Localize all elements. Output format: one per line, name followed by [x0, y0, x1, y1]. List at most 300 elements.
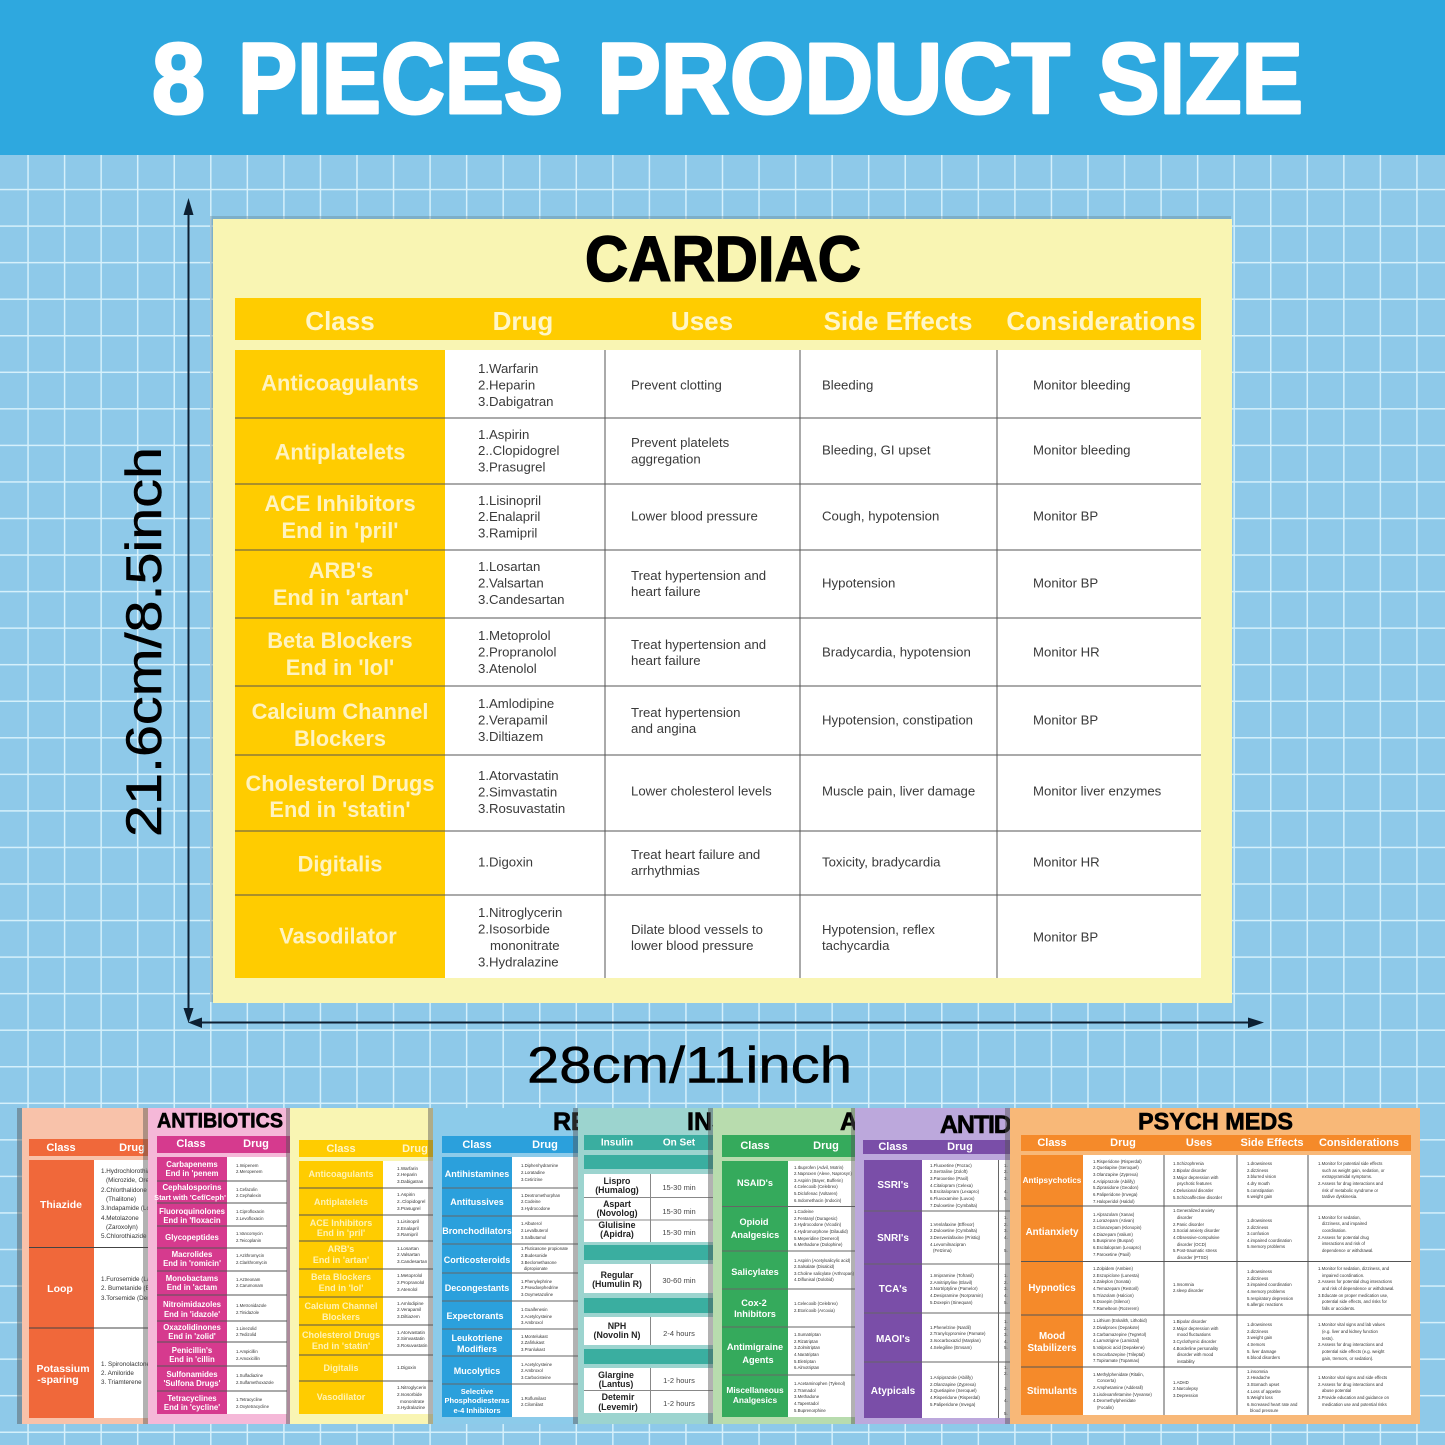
table body: Aspart [603, 1199, 631, 1209]
row: digitalis: Monitor HR [1033, 854, 1100, 870]
table body: 3.weight gain [1247, 1334, 1273, 1340]
table body: 2.Heparin [397, 1172, 417, 1176]
table body: Agents [742, 1355, 774, 1365]
row: calcium channel blockers: Treat hypertension [631, 704, 740, 720]
table body [864, 1160, 1015, 1418]
table body: 2.Duloxetine (Cymbalta) [930, 1228, 978, 1232]
heading: insulin: INSULIN [687, 1108, 787, 1136]
heading: analgesics: ANALGESICS [840, 1108, 1004, 1136]
table body: 1.Cefazolin [236, 1186, 258, 1192]
table header: Side Effects [1241, 1137, 1303, 1149]
title: PRODUCT [597, 23, 1070, 135]
table body: 1.Acetylcysteine [521, 1362, 553, 1366]
table header: Drug [493, 306, 553, 336]
table body: 5.Chlorothiazide [101, 1232, 147, 1240]
table body: 1.Sulfadiazine [236, 1372, 264, 1378]
row: cholesterol drugs: 3.Rosuvastatin [478, 800, 565, 816]
table body: 2.Tranylcypromine (Parnate) [930, 1330, 986, 1336]
table header [1021, 1135, 1411, 1151]
table body: 1.insomnia [1247, 1368, 1268, 1374]
table body: blood pressure [1250, 1408, 1279, 1412]
table body: ACE Inhibitors [310, 1218, 372, 1228]
table header: Side Effects [824, 306, 972, 336]
table body: End in 'pril' [317, 1228, 365, 1238]
row: vasodilator: Monitor BP [1033, 930, 1098, 944]
table body: coordination. [1322, 1228, 1347, 1232]
table body: End in 'artan' [313, 1255, 369, 1265]
table header: Insulin [601, 1138, 633, 1148]
table body: 6.Fluvoxamine (Luvox) [930, 1196, 975, 1200]
table body: 2.Narcolepsy [1173, 1386, 1199, 1390]
row: vasodilator: 2.Isosorbide [478, 921, 550, 936]
table body: 3.Cetirizine [521, 1176, 543, 1182]
table body: 1.Aspirin [397, 1192, 415, 1196]
table body: 2.Salsalate (Disalcid) [794, 1264, 835, 1268]
table body: Concerta) [1097, 1378, 1116, 1382]
table body: 2. [1004, 1168, 1008, 1174]
table body: 3.Salbutamol [521, 1234, 546, 1240]
table body: 3. [1004, 1332, 1008, 1336]
table body: (Apidra) [600, 1229, 634, 1239]
table body: 2.Enalapril [397, 1226, 419, 1230]
table body: 3. [1004, 1176, 1008, 1180]
table body: 2.Amitriptyline (Elavil) [930, 1280, 973, 1284]
table body: 6.Almotriptan [794, 1364, 820, 1370]
table header: Drug [119, 1142, 145, 1154]
table body: Nitroimidazoles [163, 1300, 222, 1308]
table body: 1.ADHD [1173, 1380, 1189, 1384]
table body: 1. [1004, 1162, 1008, 1168]
row: calcium channel blockers: and angina [631, 720, 697, 736]
table body: 5.Buspirone (Buspar) [1093, 1238, 1134, 1242]
table body: 2.Olanzapine (Zyprexa) [930, 1382, 976, 1386]
table body: 3.Choline salicylate (Arthropan) [794, 1270, 855, 1276]
table body: dipropionate [524, 1266, 548, 1270]
table body: 2.Assess for potential drug [1318, 1234, 1369, 1240]
table body: 1.Schizophrenia [1173, 1160, 1204, 1166]
heading: cardiac: CARDIAC [585, 223, 861, 295]
arrow: width dimension [188, 1018, 1264, 1028]
table body: 3.Isocarboxazid (Marplan) [930, 1338, 981, 1342]
table body: 1.Albuterol [521, 1220, 542, 1226]
table body: 2.Ambroxol [521, 1368, 543, 1372]
table body: 1.Aripiprazole (Abilify) [930, 1374, 973, 1380]
table body: 2.dizziness [1247, 1168, 1268, 1172]
table body: 1.Ampicillin [236, 1348, 258, 1354]
table body: 3.Oxymetazoline [521, 1292, 554, 1296]
table body: 7.Ramelteon (Rozerem) [1093, 1306, 1139, 1310]
table body: 3.Clonazepam (Klonopin) [1093, 1224, 1142, 1230]
table body: End in 'floxacin [163, 1216, 221, 1224]
table body: ARB's [328, 1244, 354, 1254]
table header: Class [740, 1140, 770, 1152]
table header: Drug [947, 1141, 973, 1153]
row: calcium channel blockers [252, 696, 1098, 750]
table body: (Zaroxolyn) [106, 1224, 138, 1230]
table body: 5. [1004, 1344, 1008, 1350]
table body: 3.Diltiazem [397, 1314, 420, 1318]
table body: 6.blood disorders [1247, 1354, 1280, 1360]
table body: NSAID's [737, 1178, 773, 1188]
row: antiplatelets: Antiplatelets [275, 440, 405, 464]
table body: 2.Amoxicillin [236, 1356, 260, 1360]
row: beta blockers [267, 628, 1100, 680]
row: anticoagulants: Anticoagulants [261, 370, 419, 396]
table body: 1.Metoprolol [397, 1272, 422, 1278]
table body: Corticosteroids [444, 1255, 510, 1265]
table body: 4.Hydromorphone (Dilaudid) [794, 1228, 849, 1234]
table body: 6.Increased heart rate and [1247, 1402, 1298, 1406]
row: beta blockers: Monitor HR [1033, 644, 1100, 660]
table body: 1.Venlafaxine (Effexor) [930, 1222, 975, 1226]
table body: 1. [1004, 1214, 1008, 1220]
row: anticoagulants: Bleeding [822, 378, 873, 392]
table body: 1.Digoxin [397, 1364, 417, 1370]
panel: antidepressants poster [851, 1108, 1170, 1424]
table body: 3.Educate on proper medication use, [1318, 1292, 1388, 1298]
table body: 2.Headache [1247, 1374, 1271, 1380]
row: anticoagulants: 1.Warfarin [478, 360, 538, 376]
table body: 2.Tedizolid [236, 1332, 257, 1336]
table body: Antihistamines [445, 1169, 509, 1179]
table body: 4.dry mouth [1247, 1180, 1270, 1186]
table body: 1.Linezolid [236, 1326, 257, 1330]
table body: extrapyramidal symptoms. [1322, 1174, 1372, 1178]
table body: 2.dizziness [1247, 1276, 1268, 1280]
table body: 1.Diphenhydramine [521, 1162, 559, 1168]
table body: Bronchodilators [442, 1226, 512, 1236]
table body: 5. [1004, 1248, 1008, 1252]
row: ace inhibitors: Monitor BP [1033, 508, 1098, 524]
table body: 1.Montelukast [521, 1334, 549, 1338]
table body [584, 1155, 718, 1413]
table body: Thiazide [40, 1199, 82, 1211]
table body: 2.Acetylcysteine [521, 1314, 553, 1318]
table body: 3.Ramipril [397, 1232, 418, 1236]
table body: 4. [1004, 1188, 1008, 1194]
table body: 1.Vancomycin [236, 1230, 263, 1236]
table body: 5. liver damage [1247, 1348, 1277, 1354]
title: SIZE [1098, 23, 1303, 135]
row: anticoagulants: 2.Heparin [478, 377, 535, 392]
table body: SSRI's [877, 1180, 909, 1190]
table body: 1.Fluticasone propionate [521, 1246, 569, 1250]
table body: 3.Torsemide (Demadex) [101, 1294, 168, 1302]
table body: 4. [1004, 1292, 1008, 1298]
table body: 2.Pseudoephedrine [521, 1284, 559, 1290]
title [152, 23, 1303, 135]
table body: mood fluctuations [1177, 1332, 1211, 1336]
row: cholesterol drugs: Lower cholesterol levels [631, 784, 772, 798]
table body: Carbapenems [166, 1160, 218, 1168]
table body: 3.confusion [1247, 1230, 1270, 1236]
table body: End in 'lol' [319, 1283, 363, 1293]
arrow: height dimension [184, 198, 194, 1023]
table body: Cholesterol Drugs [302, 1330, 380, 1340]
table body: Regular [601, 1270, 634, 1280]
table body: Lispro [604, 1176, 631, 1186]
row: beta blockers: Bradycardia, hypotension [822, 644, 971, 660]
row: antiplatelets: 3.Prasugrel [478, 459, 546, 474]
table body: 2.Levofloxacin [236, 1216, 264, 1220]
table body: (Focalin) [1097, 1404, 1114, 1410]
table body: 2.Fentanyl (Duragesic) [794, 1216, 838, 1220]
table header [157, 1136, 290, 1153]
row: ace inhibitors [264, 490, 1098, 542]
row: cholesterol drugs: Monitor liver enzymes [1033, 784, 1162, 798]
table body: 7.Haloperidol (Haldol) [1093, 1198, 1135, 1204]
table body: 1.Imipenem [236, 1162, 259, 1168]
table body: 3.Hydrocodone (Vicodin) [794, 1222, 842, 1226]
row: cholesterol drugs: Cholesterol Drugs [246, 770, 434, 796]
row: vasodilator: Hypotension, reflex [822, 922, 935, 936]
table body: Anticoagulants [308, 1169, 374, 1179]
table body: 3.Zolmitriptan [794, 1344, 821, 1350]
table body: Cephalosporins [163, 1182, 222, 1192]
table body: 4.Diazepam (Valium) [1093, 1232, 1133, 1236]
table body: 1-2 hours [663, 1376, 695, 1384]
row: beta blockers: Beta Blockers [267, 628, 413, 652]
table body: End in 'zolid' [168, 1332, 216, 1340]
table body: 1.Sumatriptan [794, 1332, 821, 1336]
table body: Mood [1039, 1330, 1065, 1342]
table body: 3.Nortriptyline (Pamelor) [930, 1286, 978, 1290]
table body: 5.Diclofenac (Voltaren) [794, 1190, 838, 1196]
table body: e-4 Inhibitors [453, 1406, 501, 1414]
table body: 3.Dabigatran [397, 1178, 424, 1184]
table body: 1.Roflumilast [521, 1396, 547, 1400]
table body: interactions and risk of [1322, 1240, 1366, 1246]
row: digitalis: arrhythmias [631, 862, 700, 878]
table body: NPH [608, 1321, 626, 1331]
table body: disorder [1177, 1214, 1193, 1220]
panel: cardiac poster [210, 216, 1232, 1003]
table body: 5.Schizoaffective disorder [1173, 1194, 1223, 1200]
row: ace inhibitors: End in 'pril' [282, 518, 398, 542]
table body: 1. Spironolactone [101, 1360, 151, 1368]
row: antiplatelets: Prevent platelets [631, 434, 730, 450]
table body: 2. [1004, 1222, 1008, 1226]
table body: (Humalog) [595, 1185, 639, 1195]
table body: potential side effects, and risks for [1322, 1298, 1387, 1304]
table body: (Microzide, Oretic) [106, 1176, 157, 1184]
table body: Stimulants [1027, 1386, 1078, 1396]
row: beta blockers: heart failure [631, 652, 701, 668]
table body: 4.Desipramine (Norpramin) [930, 1292, 983, 1298]
table body: 1.Tetracycline [236, 1396, 263, 1402]
table body: 3.Olanzapine (Zyprexa) [1093, 1172, 1138, 1176]
table body: 2.Eszopiclone (Lunesta) [1093, 1272, 1140, 1278]
table body: such as weight gain, sedation, or [1322, 1168, 1385, 1172]
table body: MAOI's [876, 1334, 910, 1344]
table body: Oxazolidinones [163, 1322, 221, 1332]
table body [442, 1157, 578, 1417]
table body: Glulisine [598, 1220, 636, 1230]
table body: 6.weight gain [1247, 1194, 1273, 1198]
table header: Class [1037, 1137, 1067, 1149]
table body: 6.Methadone (Dolophine) [794, 1242, 843, 1246]
table body: 5.Ziprasidone (Geodon) [1093, 1184, 1139, 1190]
table header: Uses [671, 306, 733, 336]
table body: 5.Doxepin (Sinequan) [930, 1300, 973, 1304]
table body: Detemir [602, 1392, 635, 1402]
table header: Drug [243, 1138, 269, 1150]
heading: psych meds: PSYCH MEDS [1138, 1108, 1293, 1136]
table body: 3. Triamterene [101, 1378, 142, 1386]
table body: 2.Lorazepam (Ativan) [1093, 1218, 1135, 1222]
table body: 2.Sertraline (Zoloft) [930, 1168, 968, 1174]
table body: gain, tremors, or sedation). [1322, 1356, 1373, 1360]
table body: Salicylates [731, 1267, 779, 1277]
table body: 3. [1004, 1228, 1008, 1232]
label: height: 21.6cm/8.5inch [116, 447, 172, 837]
table header: Drug [1110, 1137, 1136, 1149]
title banner [0, 0, 1445, 155]
table body: 2.Amphetamine (Adderall) [1093, 1384, 1143, 1390]
row: ace inhibitors: 3.Ramipril [478, 525, 537, 540]
table body: 3.Quetiapine (Seroquel) [930, 1388, 977, 1392]
heading: respiratory: RESPIRATORY [553, 1108, 731, 1136]
row: digitalis: 1.Digoxin [478, 854, 533, 870]
table body: 3.Aspirin (Bayer, Bufferin) [794, 1178, 843, 1182]
row: vasodilator: Dilate blood vessels to [631, 922, 763, 936]
table body [299, 1161, 433, 1414]
row: anticoagulants: Prevent clotting [631, 378, 722, 392]
table body: 4.Naratriptan [794, 1352, 819, 1356]
table body: 4.Dexmethylphenidate [1093, 1398, 1136, 1402]
table body: 1.Nitroglycerin [397, 1384, 427, 1390]
table body: 4.Risperidone (Risperdal) [930, 1394, 980, 1400]
table body: 1. [1004, 1272, 1008, 1278]
table body: 1.drowsiness [1247, 1268, 1272, 1274]
table body: 2.Panic disorder [1173, 1222, 1205, 1226]
table body: 4.Obsessive-compulsive [1173, 1234, 1220, 1240]
table body: 3.Prasugrel [397, 1206, 420, 1210]
row: antiplatelets: aggregation [631, 451, 701, 466]
row: antiplatelets: Bleeding, GI upset [822, 442, 931, 458]
table body: tardive dyskinesia. [1322, 1194, 1357, 1198]
table body: 4.Levomilnacipran [930, 1242, 966, 1246]
table body: 2.Clarithromycin [236, 1260, 268, 1264]
table header: On Set [663, 1138, 696, 1148]
table body: 5.Weight loss [1247, 1394, 1273, 1400]
table body: Antiplatelets [314, 1197, 368, 1207]
row: anticoagulants: 3.Dabigatran [478, 394, 554, 408]
row: antiplatelets: 1.Aspirin [478, 426, 529, 442]
table body: 1.drowsiness [1247, 1160, 1272, 1166]
table body: Beta Blockers [311, 1272, 371, 1282]
table body: 3.Hydrocodone [521, 1206, 551, 1210]
table body: 2.Assess for drug interactions and [1318, 1342, 1384, 1346]
table body: Antipsychotics [1023, 1176, 1082, 1184]
table body: 3.Pranlukast [521, 1346, 546, 1352]
table body: Antimigraine [727, 1342, 783, 1352]
table body: 2.Teicoplanin [236, 1238, 262, 1242]
table body: 2.sleep disorder [1173, 1288, 1204, 1292]
table body: Glycopeptides [165, 1232, 220, 1242]
table body: 2.Sulfamethoxazole [236, 1380, 274, 1384]
panel: diuretics poster [17, 1108, 168, 1424]
table body: 5.Paliperidone (Invega) [930, 1402, 976, 1406]
table body: 6.Indomethacin (Indocin) [794, 1198, 842, 1202]
table header [863, 1140, 1015, 1154]
table body: 1.Acetaminophen (Tylenol) [794, 1380, 846, 1386]
table header: Class [326, 1143, 356, 1155]
row: vasodilator: Vasodilator [279, 924, 397, 948]
table body: 5. [1004, 1410, 1008, 1416]
table header [584, 1135, 718, 1150]
table body: 5.Buprenorphine [794, 1408, 826, 1412]
row: cholesterol drugs [246, 768, 1162, 822]
table body: risk of metabolic syndrome or [1322, 1188, 1379, 1192]
table body [29, 1160, 168, 1418]
table body: 3.Social anxiety disorder [1173, 1228, 1220, 1232]
row: ace inhibitors: 2.Enalapril [478, 508, 540, 524]
table body: 5.Triazolam (Halcion) [1093, 1292, 1134, 1298]
table body: End in 'romicin' [163, 1258, 221, 1268]
table body: 3.Beclomethasone [521, 1260, 557, 1264]
row: arbs: ARB's [309, 558, 373, 582]
row: calcium channel blockers: 2.Verapamil [478, 712, 548, 727]
table body: 4.Tapentadol [794, 1400, 819, 1406]
table body: 1.Phenelzine (Nardil) [930, 1324, 972, 1330]
table body: Mucolytics [454, 1366, 500, 1376]
table body: 3.Major depression with [1173, 1174, 1219, 1180]
table body: 1.Ciprofloxacin [236, 1208, 265, 1214]
table body: End in 'cycline' [164, 1402, 220, 1412]
table body: Potassium [36, 1363, 90, 1375]
row: anticoagulants: Monitor bleeding [1033, 378, 1131, 392]
table body: 2.Quetiapine (Seroquel) [1093, 1164, 1139, 1170]
table body: 4. [1004, 1338, 1008, 1344]
table body: 4.tremors [1247, 1342, 1265, 1346]
table header: Uses [1186, 1137, 1212, 1149]
table body: 5.respiratory depression [1247, 1296, 1294, 1300]
table body: 2.Levalbuterol [521, 1228, 548, 1232]
table body: (Novolin N) [594, 1330, 641, 1340]
table body: 2. [1004, 1326, 1008, 1330]
table header: Drug [813, 1140, 839, 1152]
table body: dizziness, and impaired [1322, 1220, 1368, 1226]
row: vasodilator: lower blood pressure [631, 938, 753, 952]
table body: 4.impaired coordination [1247, 1238, 1292, 1242]
table body: 4.memory problems [1247, 1288, 1285, 1294]
table body: 1.Monitor vital signs and lab values [1318, 1322, 1385, 1326]
panel: insulin poster [573, 1108, 787, 1424]
table body: 3.Carbamazepine (Tegretol) [1093, 1332, 1147, 1336]
table body: 3.Ambroxol [521, 1320, 543, 1324]
table body: 1.Furosemide (Lasix) [101, 1276, 160, 1282]
table body: 2.Meropenem [236, 1168, 263, 1174]
table body: 1.Azithromycin [236, 1252, 265, 1258]
table body: 3.Hydralazine [397, 1404, 426, 1410]
row: beta blockers: 3.Atenolol [478, 660, 537, 676]
table body: 3.Depression [1173, 1392, 1199, 1398]
panel: respiratory poster [428, 1108, 731, 1424]
table body: 4.Selegiline (Emsam) [930, 1344, 972, 1350]
table body: Analgesics [733, 1395, 777, 1405]
table body: 3.Indapamide (Lozol) [101, 1204, 160, 1212]
row: ace inhibitors: Lower blood pressure [631, 508, 758, 524]
table body: tests). [1322, 1336, 1334, 1340]
table body: End in 'statin' [312, 1341, 370, 1351]
table body: Fluoroquinolones [159, 1206, 226, 1216]
table header: Class [462, 1139, 492, 1151]
table body: 2.Tinidazole [236, 1310, 260, 1314]
table body: 2.Valsartan [397, 1252, 420, 1256]
row: anticoagulants [261, 360, 1131, 408]
table body: Monobactams [166, 1274, 219, 1282]
